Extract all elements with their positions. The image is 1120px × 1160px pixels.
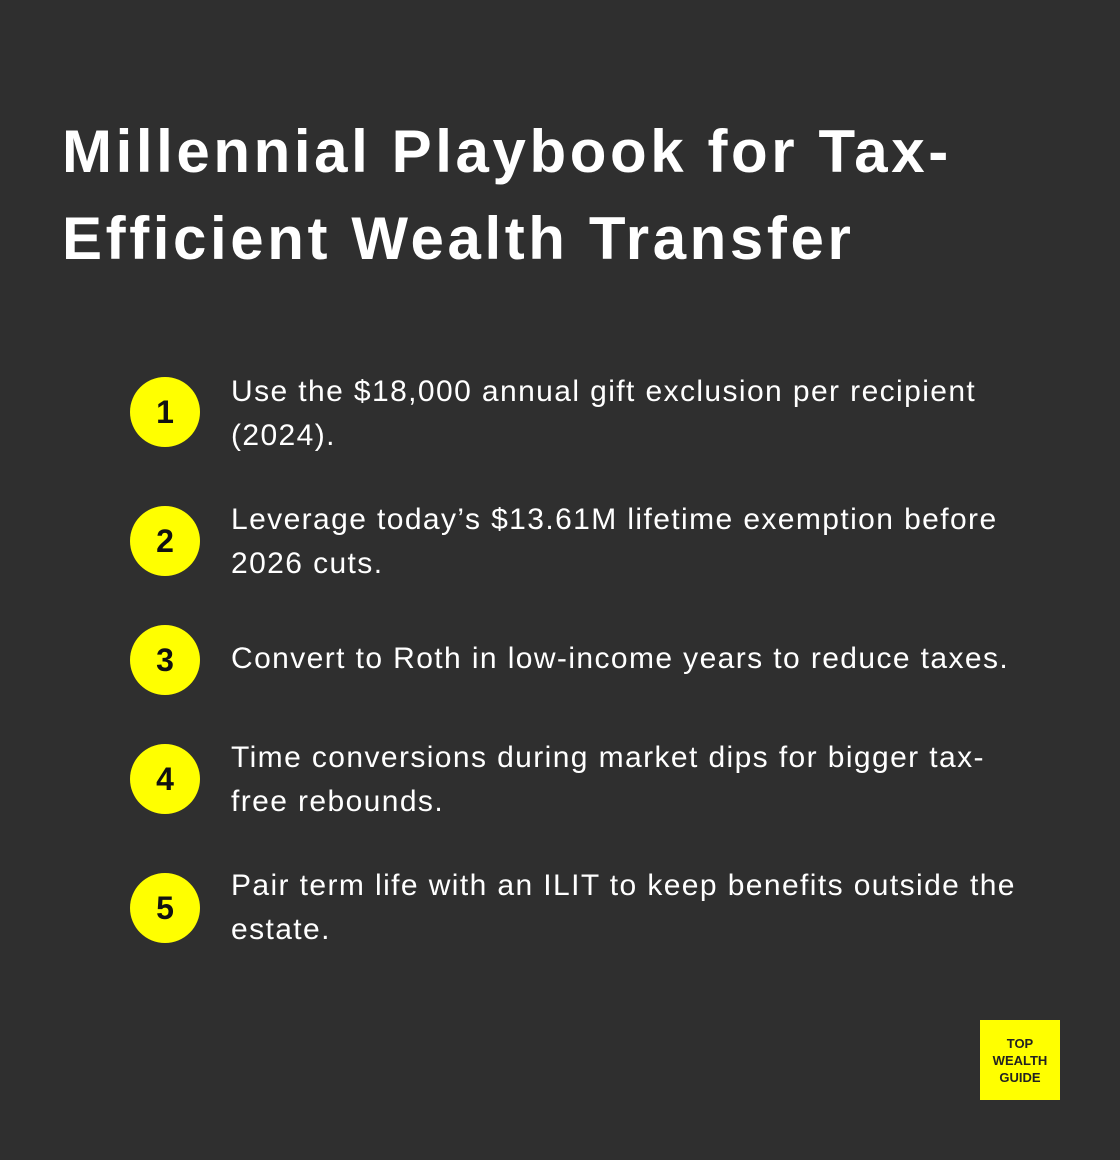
text 1: Use the $18,000 annual gift exclusion per recipient (2024).	[231, 375, 976, 452]
icon: number 3: 3	[156, 642, 174, 678]
title: Efficient Wealth Transfer	[62, 205, 854, 272]
item 2	[130, 503, 998, 580]
icon: number 4	[130, 744, 200, 814]
title: Millennial Playbook for Tax-	[62, 118, 952, 185]
logo: TOP	[1007, 1036, 1033, 1050]
item 4	[130, 741, 985, 818]
icon: number 1	[130, 377, 200, 447]
icon: number 2	[130, 506, 200, 576]
icon: number 5	[130, 873, 200, 943]
text 4: Time conversions during market dips for bigger tax-free rebounds.	[231, 741, 985, 818]
text 5: Pair term life with an ILIT to keep benefits outside the estate.	[231, 869, 1016, 946]
logo: GUIDE	[999, 1070, 1041, 1084]
logo: WEALTH	[993, 1052, 1047, 1068]
title	[62, 118, 952, 272]
text 3: Convert to Roth in low-income years to reduce taxes.	[231, 642, 1009, 675]
icon: number 1: 1	[156, 394, 174, 430]
icon: number 5: 5	[156, 890, 174, 926]
text 2: Leverage today’s $13.61M lifetime exemption before 2026 cuts.	[231, 503, 998, 580]
icon: number 3	[130, 625, 200, 695]
logo	[980, 1020, 1060, 1100]
item 1	[130, 375, 976, 452]
item 3	[130, 625, 1009, 695]
icon: number 2: 2	[156, 523, 174, 559]
icon: number 4: 4	[156, 761, 174, 797]
item 5	[130, 869, 1016, 946]
